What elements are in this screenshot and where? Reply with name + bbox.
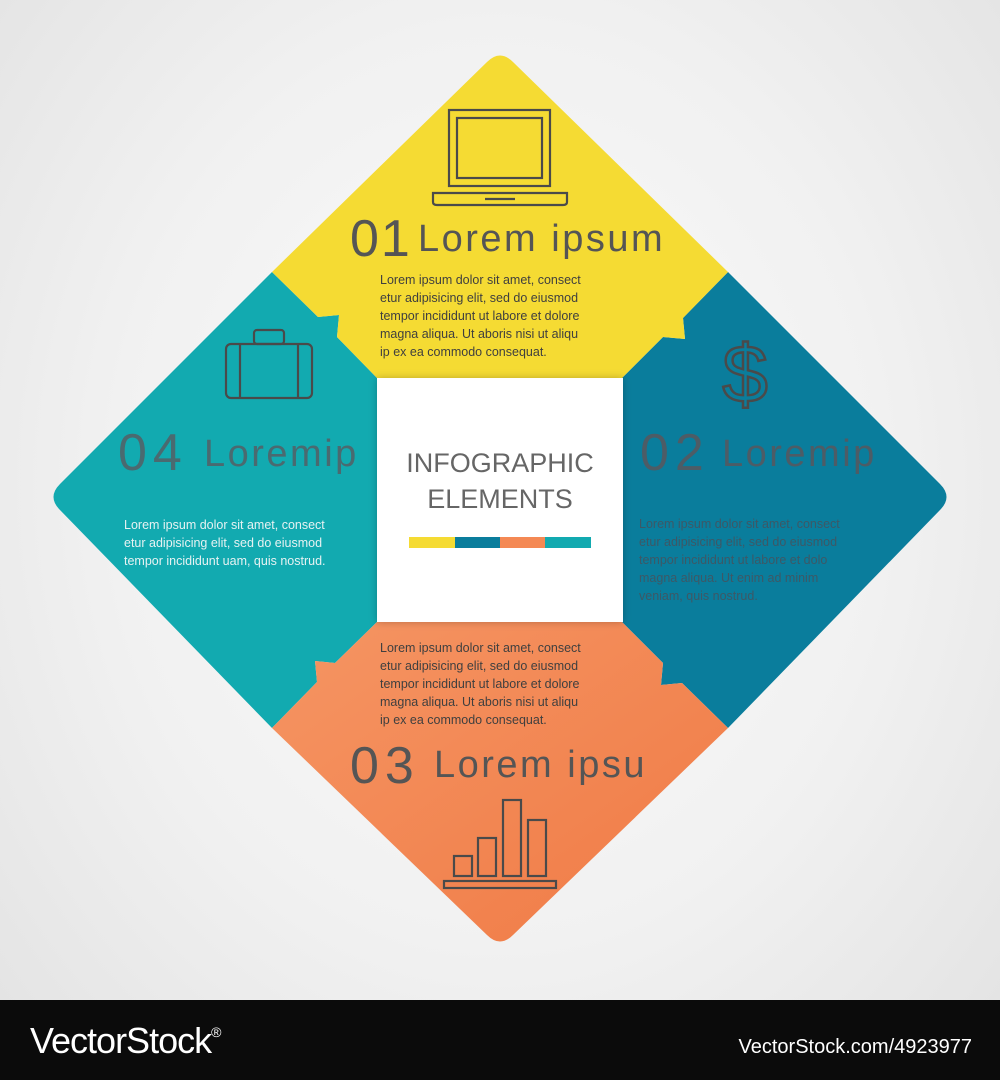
- heading 03: 03: [350, 737, 420, 795]
- text block 01: Lorem ipsum dolor sit amet, consect: [380, 273, 581, 287]
- text block 04: Lorem ipsum dolor sit amet, consect: [124, 518, 325, 532]
- text block 01: ip ex ea commodo consequat.: [380, 345, 547, 359]
- panel: 01 yellow top: Lorem ipsum: [418, 218, 665, 260]
- text block 01: etur adipisicing elit, sed do eiusmod: [380, 291, 578, 305]
- panel: 03 orange bottom: Lorem ipsu: [434, 744, 647, 786]
- footer bar: VectorStock.com/4923977: [739, 1036, 972, 1058]
- color bar: [409, 537, 591, 548]
- footer bar: VectorStock: [30, 1020, 211, 1061]
- icon: laptop: [433, 110, 567, 205]
- text block 04: tempor incididunt uam, quis nostrud.: [124, 554, 326, 568]
- text block 02: etur adipisicing elit, sed do eiusmod: [639, 535, 837, 549]
- icon: dollar: $: [722, 329, 768, 420]
- icon: briefcase: [226, 330, 312, 398]
- title: INFOGRAPHIC: [406, 448, 594, 478]
- footer bar: [0, 1000, 1000, 1080]
- heading 01: 01: [350, 210, 412, 268]
- heading 04: 04: [118, 424, 188, 482]
- panel: 02 blue right: [622, 272, 946, 728]
- panel: 04 teal left: [54, 272, 377, 728]
- text block 03: ip ex ea commodo consequat.: [380, 713, 547, 727]
- text block 03: etur adipisicing elit, sed do eiusmod: [380, 659, 578, 673]
- text block 01: tempor incididunt ut labore et dolore: [380, 309, 579, 323]
- text block 02: veniam, quis nostrud.: [639, 589, 758, 603]
- panel: 01 yellow top: [272, 56, 728, 378]
- footer bar: ®: [211, 1024, 222, 1040]
- text block 03: Lorem ipsum dolor sit amet, consect: [380, 641, 581, 655]
- panel: 03 orange bottom: [272, 622, 728, 942]
- text block 01: magna aliqua. Ut aboris nisi ut aliqu: [380, 327, 578, 341]
- center square: ELEMENTS: [427, 484, 573, 514]
- text block 02: tempor incididunt ut labore et dolo: [639, 553, 827, 567]
- panel: 04 teal left: Loremip: [204, 433, 359, 475]
- text block 03: magna aliqua. Ut aboris nisi ut aliqu: [380, 695, 578, 709]
- panel: 02 blue right: Loremip: [722, 433, 877, 475]
- text block 03: tempor incididunt ut labore et dolore: [380, 677, 579, 691]
- center square: [377, 378, 623, 622]
- heading 02: 02: [640, 424, 710, 482]
- text block 02: Lorem ipsum dolor sit amet, consect: [639, 517, 840, 531]
- text block 04: etur adipisicing elit, sed do eiusmod: [124, 536, 322, 550]
- icon: bar chart: [444, 800, 556, 888]
- text block 02: magna aliqua. Ut enim ad minim: [639, 571, 818, 585]
